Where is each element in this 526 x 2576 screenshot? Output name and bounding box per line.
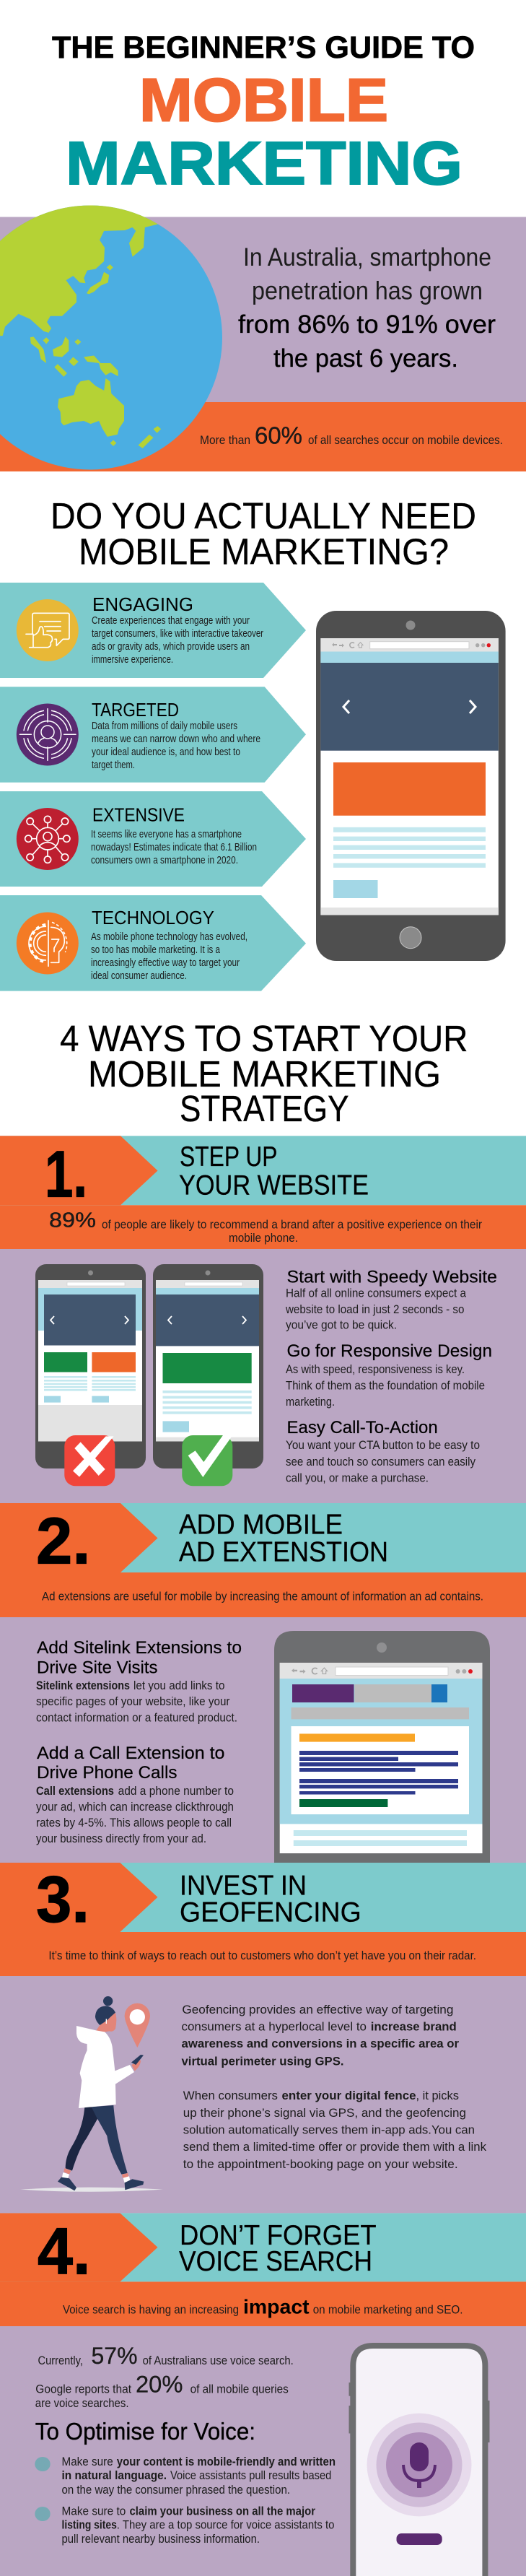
text: step 1 tips: Start with Speedy Website — [287, 1267, 497, 1287]
icon: connected network — [17, 808, 79, 870]
header: step 3 — [0, 1863, 526, 1976]
text: call extensions: Drive Phone Calls — [37, 1763, 177, 1783]
text: geofencing explanation: , it picks — [416, 2089, 459, 2102]
header: step 1: mobile phone. — [229, 1231, 298, 1245]
text: sitelink extensions: Sitelink extensions — [36, 1679, 130, 1692]
text: geofencing explanation: consumers at a hyperlocal level to — [182, 2020, 367, 2034]
text: 60 percent of searches: of all searches occur on mobile devices. — [308, 433, 503, 447]
panel: targeted: your ideal audience is, and how best to — [92, 747, 240, 758]
illustration: tablet with search ad — [274, 1631, 490, 1863]
panel: extensive: consumers own a smartphone in 2020. — [91, 855, 238, 866]
list item: mobile-friendly content: your content is mobile-friendly and written — [117, 2455, 336, 2468]
panel: technology: As mobile phone technology has evolved, — [91, 931, 247, 943]
header: step 4 — [0, 2213, 526, 2326]
text: step 1 tips: As with speed, responsiveness is key. — [286, 1363, 465, 1376]
header: step 4: Voice search is having an increasing — [63, 2303, 239, 2317]
text: step 1 tips: marketing. — [286, 1396, 335, 1409]
text: step 1 tips: you’ve got to be quick. — [286, 1319, 397, 1332]
text: 60 percent of searches: 60% — [255, 422, 302, 449]
text: voice search statistics: 20% — [136, 2372, 183, 2398]
panel: step 3 background — [0, 1976, 526, 2213]
text: geofencing explanation: Geofencing provides an effective way of targeting — [182, 2003, 453, 2016]
header: step 1: STEP UP — [180, 1141, 277, 1172]
header: step 2 — [0, 1503, 526, 1617]
text: step 1 tips — [285, 1267, 497, 1484]
list item: claim your business: pull relevant nearby business information. — [62, 2533, 260, 2546]
text: call extensions: your business directly from your ad. — [36, 1832, 206, 1845]
panel: engaging: immersive experience. — [92, 654, 173, 666]
icon: green check badge — [182, 1435, 233, 1486]
text: smartphone penetration: from 86% to 91% over — [238, 310, 496, 339]
heading: 4 ways: MOBILE MARKETING — [88, 1053, 441, 1095]
header: step 2: Ad extensions are useful for mobile by increasing the amount of information an ad contains. — [42, 1590, 483, 1604]
header: step 2: AD EXTENSTION — [179, 1537, 388, 1568]
text: sitelink extensions: contact information or a featured product. — [36, 1711, 237, 1724]
list item: claim your business: claim your business on all the major — [130, 2505, 316, 2518]
header: step 4: 4. — [38, 2215, 91, 2288]
text: geofencing explanation: increase brand — [371, 2020, 457, 2034]
text: call extensions: add a phone number to — [118, 1785, 234, 1798]
panel: engaging: target consumers, like with interactive takeover — [92, 628, 263, 640]
icon: red cross badge — [64, 1435, 115, 1486]
text: step 1 tips: Half of all online consumers expect a — [286, 1287, 467, 1300]
panel: extensive: EXTENSIVE — [92, 804, 185, 826]
text: geofencing explanation: up their phone’s signal via GPS, and the geofencing — [183, 2106, 466, 2120]
text: sitelink extensions — [36, 1638, 242, 1724]
icon: thumbs up speech bubble — [17, 599, 79, 661]
panel: technology: increasingly effective way to target your — [91, 957, 240, 969]
heading: 4 ways — [60, 1018, 468, 1129]
list item: claim your business: . They are a top source for voice assistants to — [117, 2519, 335, 2532]
heading: 4 ways: 4 WAYS TO START YOUR — [60, 1018, 468, 1059]
icon: gear and light bulb — [17, 913, 79, 975]
panel: engaging — [0, 583, 306, 678]
text: step 1 tips: Go for Responsive Design — [287, 1341, 492, 1361]
text: geofencing explanation: solution automatically serves them in-app ads.You can — [183, 2123, 475, 2136]
text: sitelink extensions: Add Sitelink Extensions to — [37, 1638, 242, 1658]
illustration: good layout phone — [153, 1264, 263, 1468]
text: smartphone penetration: In Australia, smartphone — [243, 243, 491, 271]
panel: engaging: Create experiences that engage with your — [92, 615, 250, 627]
list item: mobile-friendly content: on the way the consumer phrased the question. — [62, 2484, 290, 2497]
text: call extensions: Call extensions — [36, 1785, 114, 1798]
panel: Australia statistic band — [0, 217, 526, 403]
panel: step 1 background — [0, 1249, 526, 1503]
text: smartphone penetration — [238, 243, 496, 373]
panel: technology: ideal consumer audience. — [91, 970, 187, 982]
text: voice search statistics — [35, 2343, 294, 2410]
heading: do you actually need: DO YOU ACTUALLY NEED — [51, 495, 476, 536]
panel: technology: TECHNOLOGY — [92, 907, 214, 928]
text: sitelink extensions: specific pages of your website, like your — [36, 1695, 230, 1708]
text: voice search statistics: Google reports that — [35, 2383, 131, 2396]
text: geofencing explanation: send them a limited-time offer or provide them with a link — [183, 2140, 486, 2154]
panel: targeted: means we can narrow down who and where — [92, 734, 260, 745]
panel: technology: so too has mobile marketing. It is a — [91, 944, 221, 956]
header: step 1: YOUR WEBSITE — [179, 1170, 369, 1201]
text: voice search statistics: are voice searches. — [35, 2396, 128, 2410]
text: voice search statistics: of Australians use voice search. — [143, 2354, 294, 2367]
header: step 1: 89% — [49, 1209, 96, 1232]
text: smartphone penetration: penetration has grown — [252, 277, 483, 305]
text: geofencing explanation: to the appointment-booking page on your website. — [183, 2157, 458, 2171]
header: step 4: DON’T FORGET — [180, 2220, 377, 2251]
list item: claim your business — [35, 2505, 335, 2546]
heading: do you actually need: MOBILE MARKETING? — [79, 531, 449, 573]
header: step 4: on mobile marketing and SEO. — [313, 2303, 463, 2317]
icon: globe — [0, 201, 222, 469]
panel: extensive: nowadays! Estimates indicate that 6.1 Billion — [91, 842, 257, 853]
text: call extensions: Add a Call Extension to — [37, 1744, 225, 1763]
text: step 1 tips: You want your CTA button to be easy to — [286, 1439, 480, 1452]
list item: mobile-friendly content: Voice assistants pull results based — [170, 2469, 331, 2482]
title — [52, 30, 475, 197]
text: sitelink extensions: let you add links to — [133, 1679, 225, 1692]
illustration: bad layout phone — [35, 1264, 146, 1468]
heading: do you actually need — [51, 495, 476, 573]
heading: to optimise for voice: To Optimise for Voice: — [35, 2418, 255, 2445]
header: step 2: 2. — [36, 1505, 91, 1578]
header: step 3: INVEST IN — [180, 1871, 307, 1902]
header: step 1: of people are likely to recommend a brand after a positive experience on their — [102, 1217, 482, 1231]
list item: mobile-friendly content — [35, 2455, 336, 2497]
text: call extensions: your ad, which can increase clickthrough — [36, 1801, 234, 1814]
text: step 1 tips: Think of them as the foundation of mobile — [286, 1380, 485, 1393]
text: voice search statistics: Currently, — [38, 2354, 83, 2367]
text: geofencing explanation — [182, 2003, 486, 2171]
text: geofencing explanation: enter your digital fence — [281, 2089, 416, 2102]
text: sitelink extensions: Drive Site Visits — [37, 1658, 157, 1678]
text: step 1 tips: see and touch so consumers can easily — [286, 1455, 476, 1468]
panel: step 2 background — [0, 1617, 526, 1863]
text: 60 percent of searches: More than — [200, 433, 250, 447]
text: voice search statistics: 57% — [91, 2343, 137, 2369]
text: smartphone penetration: the past 6 years. — [273, 344, 458, 373]
text: call extensions: rates by 4-5%. This allows people to call — [36, 1816, 232, 1829]
text: geofencing explanation: virtual perimeter using GPS. — [182, 2054, 343, 2068]
text: step 1 tips: call you, or make a purchase. — [286, 1471, 429, 1484]
panel: extensive: It seems like everyone has a smartphone — [91, 829, 242, 840]
icon: target on person — [17, 703, 79, 765]
text: call extensions — [36, 1744, 234, 1845]
list item: mobile-friendly content: in natural language. — [62, 2469, 167, 2482]
panel: engaging: ads or gravity ads, which provide users an — [92, 641, 250, 653]
panel: orange statistic band — [0, 402, 526, 471]
heading: 4 ways: STRATEGY — [180, 1088, 349, 1129]
title: MARKETING — [66, 129, 463, 197]
panel: targeted: TARGETED — [92, 699, 179, 721]
text: voice search statistics: of all mobile queries — [190, 2383, 289, 2396]
text: geofencing explanation: When consumers — [183, 2089, 278, 2102]
text: 60 percent of searches — [200, 422, 503, 449]
illustration: phone with web page — [316, 611, 506, 961]
illustration: person walking with phone and map pin — [20, 1996, 163, 2192]
text: step 1 tips: website to load in just 2 seconds - so — [285, 1303, 464, 1316]
header: step 4: impact — [243, 2296, 310, 2318]
header: step 2: ADD MOBILE — [179, 1510, 343, 1541]
header: step 3: It’s time to think of ways to reach out to customers who don’t yet have you on their radar. — [48, 1949, 476, 1962]
list item: mobile-friendly content: Make sure — [62, 2455, 113, 2468]
panel: extensive — [0, 791, 306, 887]
panel: targeted: target them. — [92, 760, 135, 771]
text: geofencing explanation: awareness and conversions in a specific area or — [182, 2037, 459, 2050]
list item: claim your business: Make sure to — [62, 2505, 126, 2518]
header: step 1 — [0, 1136, 526, 1249]
illustration: phone with microphone — [349, 2346, 489, 2576]
header: step 3: 3. — [36, 1863, 89, 1936]
header: step 1: 1. — [45, 1139, 87, 1211]
panel: targeted — [0, 687, 306, 783]
panel: step 4 background — [0, 2326, 526, 2576]
header: step 3: GEOFENCING — [180, 1897, 361, 1928]
panel: engaging: ENGAGING — [92, 593, 193, 615]
title: THE BEGINNER’S GUIDE TO — [52, 30, 475, 65]
title: MOBILE — [139, 66, 388, 134]
panel: targeted: Data from millions of daily mobile users — [92, 721, 237, 732]
text: step 1 tips: Easy Call-To-Action — [287, 1418, 438, 1437]
panel: technology — [0, 895, 306, 991]
header: step 4: VOICE SEARCH — [179, 2246, 372, 2277]
list item: claim your business: listing sites — [62, 2519, 117, 2532]
